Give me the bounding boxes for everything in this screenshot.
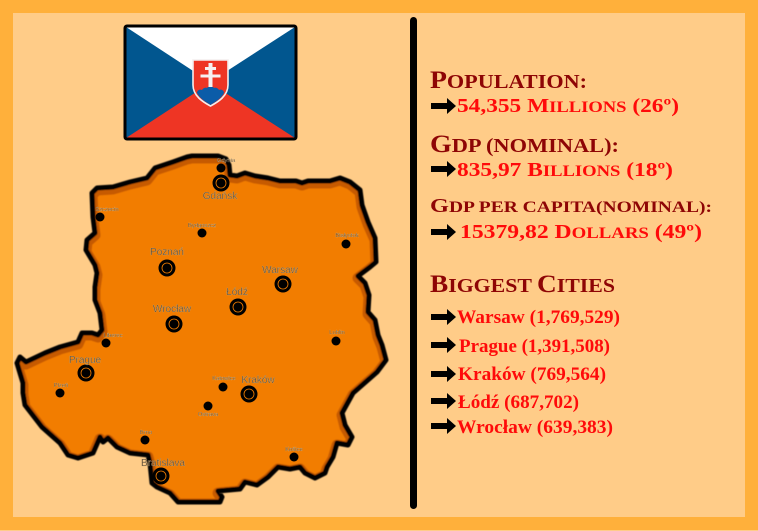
arrow: Kraków: [431, 366, 456, 382]
major cities: Gdańsk: [203, 191, 238, 202]
major cities: Warsaw: [262, 265, 299, 276]
minor cities: Brno: [140, 430, 152, 436]
icon: coat of arms shield: [193, 60, 228, 106]
city list: Warsaw (1,769,529): [457, 307, 620, 328]
minor cities: Katowice: [212, 376, 236, 382]
major cities: Bratislava: [141, 458, 185, 469]
gdp nominal heading: GDP (NOMINAL):: [430, 131, 619, 158]
population arrow: [431, 98, 456, 114]
biggest cities heading: BIGGEST CITIES: [430, 271, 615, 298]
minor cities: Lublin: [329, 330, 345, 336]
flag: [125, 26, 296, 139]
major cities: Wrocław: [153, 304, 192, 315]
gdp value: 835,97 B ILLIONS (18º): [457, 160, 673, 181]
population heading: POPULATION:: [430, 67, 587, 94]
major cities: Prague: [69, 355, 102, 366]
city list: Prague (1,391,508): [459, 336, 610, 357]
minor cities: Gdynia: [217, 158, 236, 164]
minor cities: Białystok: [335, 233, 359, 239]
minor cities: Košice: [285, 447, 303, 453]
arrow: Warsaw: [431, 309, 456, 325]
minor cities: Bydgoszcz: [188, 223, 216, 229]
major cities: [69, 174, 299, 484]
minor cities: Plzeň: [54, 383, 68, 389]
city list: Łódź (687,702): [458, 392, 579, 413]
arrow: Wrocław: [431, 418, 456, 434]
minor cities: Szczecin: [95, 207, 119, 213]
minor cities: Ostrava: [198, 412, 219, 418]
gdp per capita arrow: [431, 224, 456, 240]
minor cities: Liberec: [103, 333, 123, 339]
major cities: Poznań: [150, 247, 184, 258]
population value: 54,355 M ILLIONS (26º): [457, 96, 679, 117]
arrow: Prague: [431, 337, 456, 353]
major cities: Kraków: [241, 375, 275, 386]
city list: [431, 307, 620, 438]
city list: Wrocław (639,383): [457, 417, 613, 438]
gdp arrow: [431, 161, 456, 177]
map shape: [17, 156, 386, 504]
gdp per capita heading: GDP PER CAPITA(NOMINAL):: [430, 195, 712, 217]
major cities: Łódź: [226, 287, 248, 298]
divider: [410, 17, 417, 509]
arrow: Łódź: [431, 393, 456, 409]
map: [17, 156, 386, 504]
minor cities: [54, 158, 359, 462]
city list: Kraków (769,564): [458, 364, 606, 385]
gdp per capita value: 15379,82 D OLLARS (49º): [460, 222, 702, 243]
